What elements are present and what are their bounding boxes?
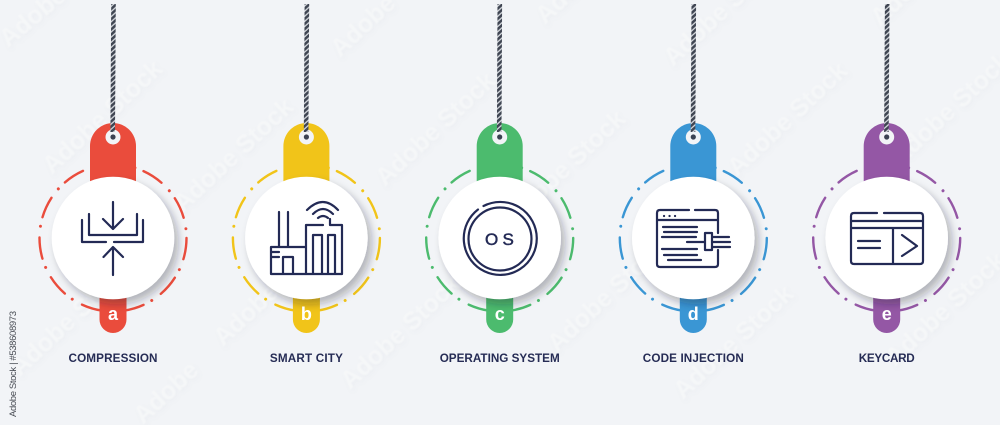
tag hole e xyxy=(879,130,894,144)
watermarks: Adobe Stock xyxy=(668,280,799,404)
watermarks: Adobe Stock xyxy=(5,257,136,381)
white disc e xyxy=(825,177,948,299)
letter a: a xyxy=(108,304,119,324)
icon: code injection xyxy=(657,210,730,267)
step a: compression xyxy=(9,4,217,365)
white disc a xyxy=(52,177,174,299)
rope b xyxy=(304,4,309,132)
watermarks: Adobe Stock xyxy=(168,93,299,217)
stock id text: Adobe Stock | #538608973 xyxy=(8,311,19,417)
icon: keycard xyxy=(851,213,923,264)
icon: operating system xyxy=(464,202,537,275)
label: keycard: KEYCARD xyxy=(859,352,915,365)
letter c: c xyxy=(495,304,505,324)
letter d: d xyxy=(688,304,699,324)
rope d xyxy=(691,4,696,132)
tag hole b xyxy=(299,130,314,144)
white disc b xyxy=(245,177,368,299)
dashed ring b xyxy=(203,134,410,342)
letter e: e xyxy=(882,304,892,324)
white disc d xyxy=(632,177,755,299)
tag a xyxy=(90,123,136,333)
label: smart city: SMART CITY xyxy=(270,352,343,365)
letter b: b xyxy=(301,304,312,324)
dashed ring c xyxy=(396,134,603,342)
icon: compression xyxy=(82,202,143,275)
dashed ring e xyxy=(783,134,990,342)
tag hole d xyxy=(686,130,701,144)
watermarks: Adobe Stock xyxy=(208,227,339,351)
tag b xyxy=(283,123,329,333)
icon: operating system: OS xyxy=(485,230,514,249)
step e: keycard xyxy=(783,4,990,365)
watermarks: Adobe Stock xyxy=(335,270,466,394)
dashed ring a xyxy=(9,134,217,342)
watermarks: Adobe Stock xyxy=(37,55,168,179)
label: code injection: CODE INJECTION xyxy=(643,352,744,365)
step b: smart city xyxy=(203,4,410,365)
watermarks: Adobe Stock xyxy=(542,233,673,357)
step d: code injection xyxy=(590,4,797,365)
label: compression: COMPRESSION xyxy=(68,352,158,365)
label: operating system: OPERATING SYSTEM xyxy=(440,352,560,365)
dashed ring d xyxy=(590,134,797,342)
rope c xyxy=(497,4,502,132)
watermarks: Adobe Stock xyxy=(500,105,631,229)
rope a xyxy=(110,4,116,132)
icon: smart city xyxy=(271,202,342,274)
white disc c xyxy=(438,177,561,299)
watermarks: Adobe Stock xyxy=(370,67,501,191)
tag hole c xyxy=(492,130,507,144)
tag d xyxy=(670,123,716,333)
tag c xyxy=(477,123,523,333)
tag hole a xyxy=(106,130,120,144)
watermarks: Adobe Stock xyxy=(722,57,853,181)
tag e xyxy=(864,123,910,333)
rope e xyxy=(884,4,890,132)
step c: operating system xyxy=(396,4,603,365)
